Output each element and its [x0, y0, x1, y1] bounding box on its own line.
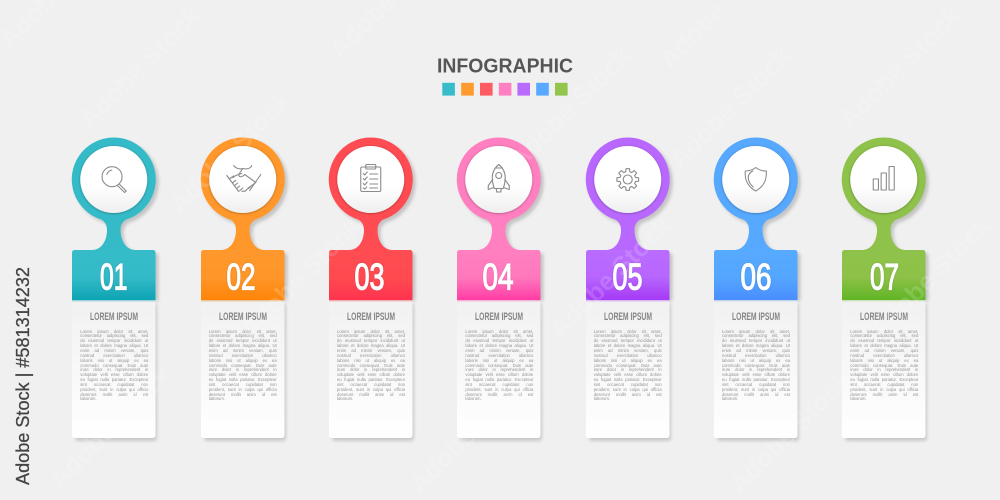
column 04: rocket [456, 138, 545, 442]
body text: irure dolor in reprehenderit in [850, 367, 918, 372]
body text: commodo consequat. Duis aute [594, 362, 662, 368]
heading: LOREM IPSUM [347, 311, 395, 323]
body text: commodo consequat. Duis aute [209, 362, 277, 368]
column 07: bar chart [842, 138, 930, 442]
icon: magnifier [102, 167, 127, 192]
watermark layer: Adobe Stock [723, 365, 857, 499]
body text: Lorem ipsum dolor sit amet, [337, 329, 405, 334]
body text: eu fugiat nulla pariatur. Excepteur [850, 377, 918, 382]
body text: eu fugiat nulla pariatur. Excepteur [337, 377, 405, 382]
body text: commodo consequat. Duis aute [337, 362, 405, 368]
body text: nostrud exercitation ullamco [80, 353, 148, 358]
body text: laborum. [465, 396, 482, 401]
icon: clipboard [361, 164, 381, 192]
body text: labore et dolore magna aliqua. Ut [722, 343, 790, 348]
colour palette squares [442, 83, 568, 96]
body text: proident, sunt in culpa qui officia [209, 387, 277, 392]
card shadow [845, 303, 927, 441]
body text: proident, sunt in culpa qui officia [337, 387, 405, 392]
body text: nostrud exercitation ullamco [594, 353, 662, 358]
card shadow [589, 303, 671, 441]
icon: handshake [226, 166, 260, 192]
body text: laborum. [722, 396, 738, 401]
icon disc [594, 146, 661, 213]
card [201, 300, 284, 438]
pin shape [714, 137, 798, 300]
watermark layer: Adobe Stock [833, 0, 967, 134]
body text: nostrud exercitation ullamco [209, 353, 277, 358]
pin shape [200, 137, 284, 300]
card [586, 300, 669, 438]
card [72, 300, 156, 438]
watermark layer: Adobe Stock [403, 365, 537, 499]
body text: eu fugiat nulla pariatur. Excepteur [594, 377, 662, 382]
body text: irure dolor in reprehenderit in [465, 367, 533, 372]
number band [586, 250, 669, 300]
column 01: search [72, 138, 160, 442]
icon: gear [617, 169, 638, 190]
body text: do eiusmod tempor incididunt ut [594, 338, 662, 343]
body text: consectetur adipiscing elit, sed [594, 333, 662, 338]
body text: nostrud exercitation ullamco [850, 353, 918, 358]
number band [842, 250, 926, 300]
body text: labore et dolore magna aliqua. Ut [80, 343, 148, 348]
body text: proident, sunt in culpa qui officia [80, 387, 148, 392]
body text: laboris nisi ut aliquip ex ea [465, 358, 533, 363]
body text: proident, sunt in culpa qui officia [594, 387, 662, 392]
number: 05 [612, 256, 642, 298]
body text: Lorem ipsum dolor sit amet, [465, 329, 533, 334]
watermark layer: Adobe Stock [233, 210, 367, 344]
body text: voluptate velit esse cillum dolore [80, 372, 148, 377]
pin shape [457, 137, 541, 300]
icon: bars [874, 166, 895, 190]
heading: LOREM IPSUM [90, 311, 138, 323]
card shadow [332, 303, 414, 441]
heading: LOREM IPSUM [732, 311, 780, 323]
icon disc [722, 146, 789, 213]
number: 01 [100, 256, 128, 298]
body text: irure dolor in reprehenderit in [722, 367, 790, 372]
body text: irure dolor in reprehenderit in [337, 367, 405, 372]
watermark layer: Adobe Stock [73, 0, 207, 134]
pin shadow [75, 140, 159, 301]
body text: Lorem ipsum dolor sit amet, [209, 329, 277, 334]
body text: deserunt mollit anim id est [337, 392, 405, 397]
body text: enim ad minim veniam, quis [465, 348, 533, 353]
body text: irure dolor in reprehenderit in [80, 367, 148, 372]
icon disc [851, 146, 918, 213]
body text: enim ad minim veniam, quis [337, 348, 405, 353]
body text: deserunt mollit anim id est [722, 392, 790, 397]
icon disc [337, 146, 404, 213]
body text: deserunt mollit anim id est [80, 392, 148, 397]
body text: consectetur adipiscing elit, sed [337, 333, 405, 338]
icon: rocket [489, 164, 510, 192]
body text: laborum. [850, 396, 867, 401]
body text: proident, sunt in culpa qui officia [850, 387, 918, 392]
column 02: handshake [200, 138, 289, 442]
pin shadow [460, 140, 544, 301]
watermark layer: Adobe Stock [503, 40, 637, 174]
body text: do eiusmod tempor incididunt ut [80, 338, 148, 343]
body text: enim ad minim veniam, quis [80, 348, 148, 353]
body text: eu fugiat nulla pariatur. Excepteur [722, 377, 790, 382]
body text: laboris nisi ut aliquip ex ea [850, 358, 918, 363]
icon: shield [745, 168, 766, 191]
body text: irure dolor in reprehenderit in [594, 367, 662, 372]
body text: eu fugiat nulla pariatur. Excepteur [80, 377, 148, 382]
body text: enim ad minim veniam, quis [209, 348, 277, 353]
card shadow [460, 303, 542, 441]
body text: laborum. [594, 396, 610, 401]
body text: laborum. [80, 396, 97, 401]
body text: laborum. [337, 396, 353, 401]
body text: nostrud exercitation ullamco [465, 353, 533, 358]
body text: deserunt mollit anim id est [850, 392, 918, 397]
body text: eu fugiat nulla pariatur. Excepteur [465, 377, 533, 382]
body text: do eiusmod tempor incididunt ut [337, 338, 405, 343]
watermark layer: Adobe Stock [43, 360, 177, 494]
body text [337, 329, 405, 401]
body text: sint occaecat cupidatat non [850, 382, 918, 387]
body text: voluptate velit esse cillum dolore [722, 372, 790, 377]
heading: LOREM IPSUM [475, 311, 523, 323]
column 05: gear [586, 138, 674, 442]
body text: labore et dolore magna aliqua. Ut [594, 343, 662, 348]
number: 07 [870, 256, 899, 298]
pin shadow [717, 140, 801, 301]
card shadow [204, 303, 286, 441]
body text: deserunt mollit anim id est [594, 392, 662, 397]
body text: voluptate velit esse cillum dolore [850, 372, 918, 377]
pin shadow [332, 140, 416, 301]
body text: laborum. [209, 396, 225, 401]
number: 02 [226, 256, 255, 298]
body text: commodo consequat. Duis aute [80, 362, 148, 368]
body text: proident, sunt in culpa qui officia [722, 387, 790, 392]
body text: proident, sunt in culpa qui officia [465, 387, 533, 392]
body text: deserunt mollit anim id est [465, 392, 533, 397]
title: INFOGRAPHIC [437, 55, 573, 77]
body text: voluptate velit esse cillum dolore [337, 372, 405, 377]
watermark layer: Adobe Stock [863, 210, 997, 344]
card [457, 300, 541, 438]
card shadow [75, 303, 157, 441]
body text [208, 329, 277, 401]
body text: do eiusmod tempor incididunt ut [465, 338, 533, 343]
body text: commodo consequat. Duis aute [465, 362, 533, 368]
body text: sint occaecat cupidatat non [722, 382, 790, 387]
body text: sint occaecat cupidatat non [80, 382, 148, 387]
card shadow [717, 303, 799, 441]
body text: laboris nisi ut aliquip ex ea [80, 358, 148, 363]
body text: nostrud exercitation ullamco [722, 353, 790, 358]
body text [722, 329, 790, 401]
body text: laboris nisi ut aliquip ex ea [337, 358, 405, 363]
body text: commodo consequat. Duis aute [850, 362, 918, 368]
body text: voluptate velit esse cillum dolore [465, 372, 533, 377]
number band [201, 250, 284, 300]
icon disc [209, 146, 276, 213]
pin shadow [845, 140, 929, 301]
body text: Lorem ipsum dolor sit amet, [722, 329, 790, 334]
body text: sint occaecat cupidatat non [337, 382, 405, 387]
body text: laboris nisi ut aliquip ex ea [209, 358, 277, 363]
number band [72, 250, 156, 300]
body text: laboris nisi ut aliquip ex ea [594, 358, 662, 363]
body text: enim ad minim veniam, quis [722, 348, 790, 353]
body text: Lorem ipsum dolor sit amet, [80, 329, 148, 334]
card [842, 300, 926, 438]
number band [457, 250, 541, 300]
body text [80, 329, 148, 401]
pin shadow [588, 140, 672, 301]
body text: sint occaecat cupidatat non [209, 382, 277, 387]
body text: labore et dolore magna aliqua. Ut [850, 343, 918, 348]
body text: eu fugiat nulla pariatur. Excepteur [209, 377, 277, 382]
body text: labore et dolore magna aliqua. Ut [465, 343, 533, 348]
watermark layer: Adobe Stock [663, 40, 797, 174]
body text: do eiusmod tempor incididunt ut [850, 338, 918, 343]
watermark layer: Adobe Stock [543, 210, 677, 344]
body text [465, 329, 534, 401]
body text: voluptate velit esse cillum dolore [594, 372, 662, 377]
body text [594, 329, 662, 401]
body text: irure dolor in reprehenderit in [209, 367, 277, 372]
body text: do eiusmod tempor incididunt ut [722, 338, 790, 343]
body text: voluptate velit esse cillum dolore [209, 372, 277, 377]
body text: sint occaecat cupidatat non [465, 382, 533, 387]
heading: LOREM IPSUM [219, 311, 267, 323]
icon disc [466, 146, 533, 213]
body text: labore et dolore magna aliqua. Ut [209, 343, 277, 348]
body text: consectetur adipiscing elit, sed [465, 333, 533, 338]
body text: enim ad minim veniam, quis [594, 348, 662, 353]
body text: Lorem ipsum dolor sit amet, [850, 329, 918, 334]
body text: consectetur adipiscing elit, sed [80, 333, 148, 338]
pin shadow [203, 140, 287, 301]
body text: sint occaecat cupidatat non [594, 382, 662, 387]
body text: consectetur adipiscing elit, sed [209, 333, 277, 338]
pin shape [842, 137, 926, 300]
number band [329, 250, 412, 300]
body text: enim ad minim veniam, quis [850, 348, 918, 353]
body text: Lorem ipsum dolor sit amet, [594, 329, 662, 334]
body text: nostrud exercitation ullamco [337, 353, 405, 358]
heading: LOREM IPSUM [604, 311, 652, 323]
body text [850, 329, 918, 401]
card [329, 300, 412, 438]
column 06: shield [714, 138, 802, 442]
body text: laboris nisi ut aliquip ex ea [722, 358, 790, 363]
watermark layer: Adobe Stock [163, 85, 297, 219]
number: 04 [483, 256, 514, 298]
heading: LOREM IPSUM [860, 311, 908, 323]
icon disc [81, 146, 148, 213]
pin shape [72, 137, 156, 300]
number: 03 [354, 256, 384, 298]
card [714, 300, 798, 438]
body text: labore et dolore magna aliqua. Ut [337, 343, 405, 348]
side credit: Adobe Stock | #581314232 [13, 267, 33, 485]
pin shape [329, 137, 413, 300]
body text: do eiusmod tempor incididunt ut [209, 338, 277, 343]
body text: consectetur adipiscing elit, sed [722, 333, 790, 338]
body text: consectetur adipiscing elit, sed [850, 333, 918, 338]
number: 06 [740, 256, 772, 298]
column 03: checklist [328, 138, 417, 442]
pin shape [585, 137, 669, 300]
body text: commodo consequat. Duis aute [722, 362, 790, 368]
body text: deserunt mollit anim id est [209, 392, 277, 397]
number band [714, 250, 798, 300]
